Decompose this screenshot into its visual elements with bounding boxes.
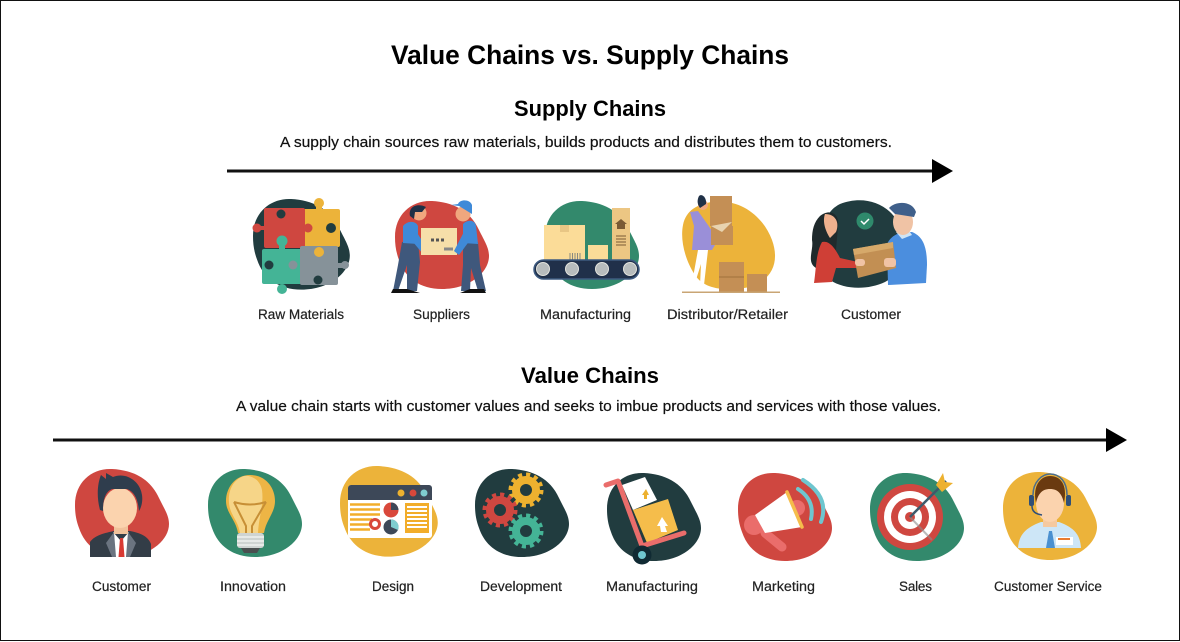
label: customer service: Customer Service — [994, 579, 1102, 594]
arrow: value chain — [53, 428, 1127, 452]
icon: sales target — [870, 473, 964, 561]
icon: development gears — [475, 469, 569, 557]
icon: customer person — [75, 469, 169, 557]
text: value chain description: A value chain starts with customer values and seeks to imbue products and services with those values. — [236, 398, 941, 415]
icon: distributor boxes — [682, 195, 780, 293]
label: manufacturing: Manufacturing — [540, 307, 631, 322]
label: manufacturing: Manufacturing — [606, 579, 698, 594]
label: distributor/retailer: Distributor/Retailer — [667, 307, 789, 322]
heading: value chains: Value Chains — [521, 363, 659, 388]
icon: marketing megaphone — [738, 473, 832, 561]
label: innovation: Innovation — [220, 579, 286, 594]
label: customer: Customer — [92, 579, 152, 594]
label: marketing: Marketing — [752, 579, 815, 594]
icon: raw materials puzzle — [252, 198, 350, 294]
arrow: supply chain — [227, 159, 953, 183]
heading: supply chains: Supply Chains — [514, 96, 666, 121]
text: supply chain description: A supply chain sources raw materials, builds products and distributes them to customers. — [280, 134, 892, 151]
label: development: Development — [480, 579, 562, 594]
label: suppliers: Suppliers — [413, 307, 470, 322]
label: design: Design — [372, 579, 414, 594]
label: sales: Sales — [899, 579, 932, 594]
icon: manufacturing conveyor — [534, 201, 639, 289]
title: Value Chains vs. Supply Chains — [391, 40, 789, 70]
icon: innovation lightbulb — [208, 469, 302, 557]
label: raw materials: Raw Materials — [258, 307, 344, 322]
icon: manufacturing hand truck — [606, 473, 701, 564]
label: customer: Customer — [841, 307, 902, 322]
icon: customer receiving package — [811, 200, 927, 288]
icon: design dashboard — [340, 466, 438, 557]
icon: customer service agent — [1003, 472, 1097, 560]
icon: suppliers — [391, 200, 489, 293]
